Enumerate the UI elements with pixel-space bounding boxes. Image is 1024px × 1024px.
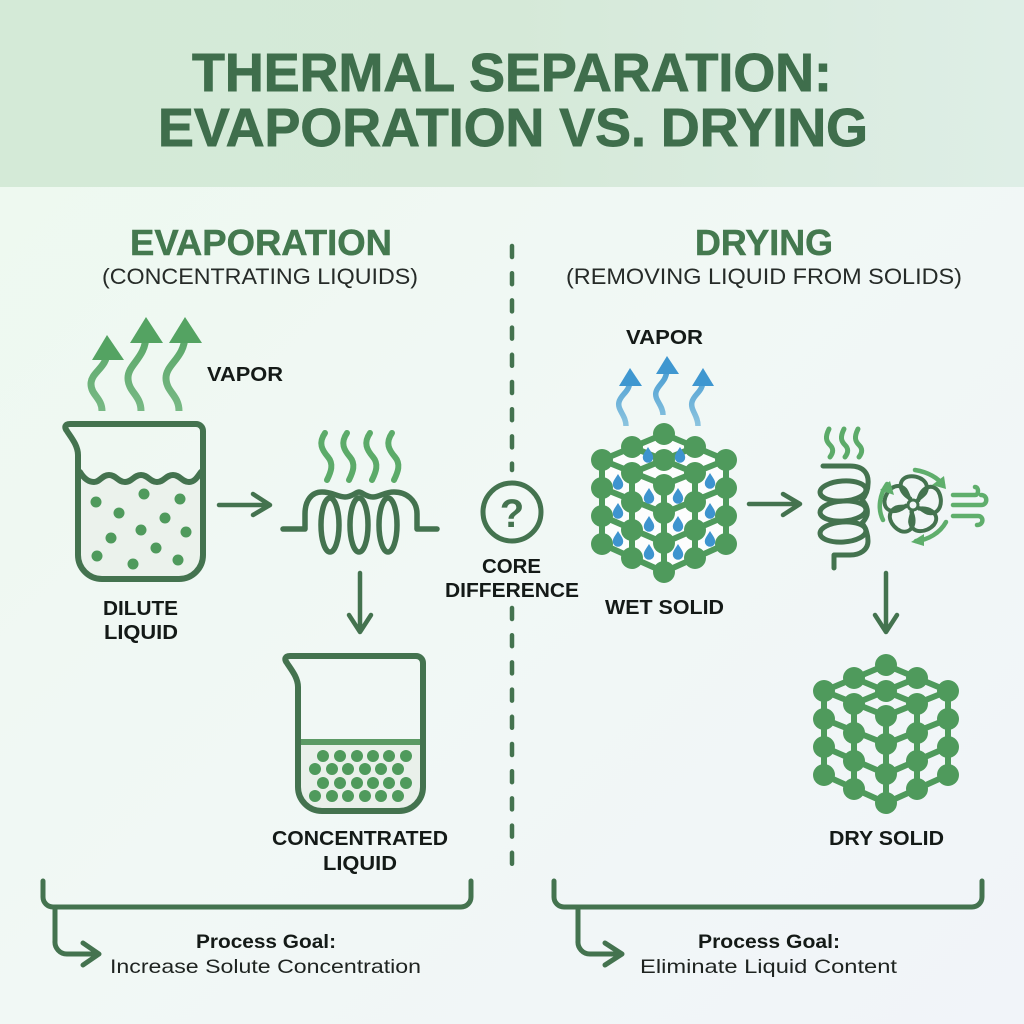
title	[158, 43, 868, 158]
process goal text: Eliminate Liquid Content	[640, 956, 898, 978]
arrow: heater to dry solid	[875, 573, 897, 632]
panel: evaporation	[43, 222, 471, 978]
core difference label	[445, 556, 579, 602]
process goal text: Process Goal:	[196, 931, 336, 953]
icon: blue vapor arrows	[619, 356, 714, 426]
process goal text: Process Goal:	[698, 931, 840, 953]
icon: wet solid lattice	[591, 423, 737, 583]
process goal text	[640, 931, 898, 978]
icon: beaker with concentrated liquid	[285, 656, 423, 811]
bracket and goal arrow	[554, 881, 982, 965]
arrow: beaker to heating coil	[219, 494, 270, 515]
panel: drying	[554, 222, 986, 978]
core difference label: DIFFERENCE	[445, 580, 579, 602]
concentrated liquid label	[272, 828, 448, 875]
icon: heating spring	[819, 429, 868, 568]
concentrated liquid label: CONCENTRATED	[272, 828, 448, 850]
core difference label: CORE	[482, 556, 541, 578]
process goal text	[110, 931, 421, 978]
arrow: coil to concentrated beaker	[349, 573, 371, 632]
icon: dry solid lattice	[813, 654, 959, 814]
drying subtitle: (REMOVING LIQUID FROM SOLIDS)	[566, 264, 962, 289]
icon: fan with airflow	[880, 470, 986, 546]
vapor label: VAPOR	[207, 364, 284, 386]
concentrated liquid label: LIQUID	[323, 853, 397, 875]
evaporation subtitle: (CONCENTRATING LIQUIDS)	[102, 264, 418, 289]
icon: heating coil with heat waves	[283, 433, 437, 552]
dilute liquid label	[103, 598, 178, 644]
dilute liquid label: DILUTE	[103, 598, 178, 620]
bracket and goal arrow	[43, 881, 471, 965]
arrow: wet solid to heater	[749, 494, 800, 515]
wet solid label: WET SOLID	[605, 597, 724, 619]
dilute liquid label: LIQUID	[104, 622, 178, 644]
icon: vapor arrows	[91, 317, 202, 411]
center divider	[510, 246, 514, 866]
icon: beaker with dilute liquid	[65, 424, 203, 579]
drying heading: DRYING	[695, 222, 833, 263]
title: EVAPORATION VS. DRYING	[158, 98, 868, 158]
evaporation heading: EVAPORATION	[130, 222, 392, 263]
icon: core difference question mark: ?	[500, 492, 524, 536]
dry solid label: DRY SOLID	[829, 828, 944, 850]
vapor label: VAPOR	[626, 327, 704, 349]
icon: core difference question mark	[483, 483, 541, 541]
process goal text: Increase Solute Concentration	[110, 956, 421, 978]
title: THERMAL SEPARATION:	[192, 43, 832, 103]
